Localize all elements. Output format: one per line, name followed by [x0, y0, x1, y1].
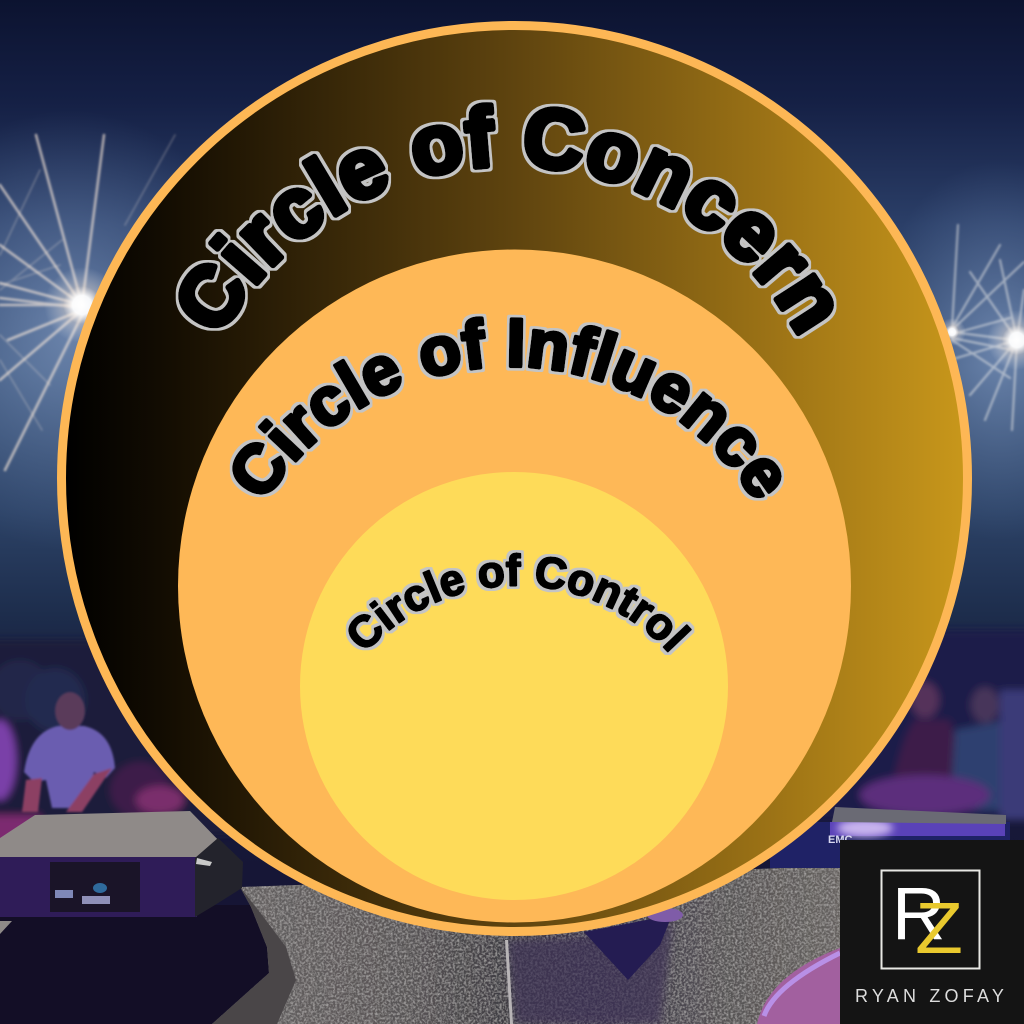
speaker	[0, 811, 243, 934]
logo: Ryan Zofay	[840, 840, 1024, 1024]
person in shirt	[22, 692, 115, 812]
logo frame	[882, 870, 980, 968]
stage monitor screen: EMC	[828, 834, 852, 846]
light burst: right	[950, 225, 1024, 430]
logo name: RYAN ZOFAY	[855, 986, 1008, 1006]
label: circle of concern: Circle of Concern	[176, 100, 836, 339]
audience: left	[0, 640, 240, 845]
circle of control	[300, 472, 728, 900]
stage monitor screen	[770, 807, 1010, 868]
stage floor light	[757, 948, 840, 1024]
logo monogram Z: Z	[915, 889, 963, 969]
light burst: left	[0, 135, 175, 470]
floor	[0, 905, 300, 1024]
audience: right	[800, 630, 1024, 820]
label: circle of control: Circle of Control	[346, 550, 694, 655]
stage platform	[212, 866, 840, 1024]
logo monogram R: R	[892, 872, 945, 955]
label: circle of influence: Circle of Influence	[230, 314, 784, 501]
